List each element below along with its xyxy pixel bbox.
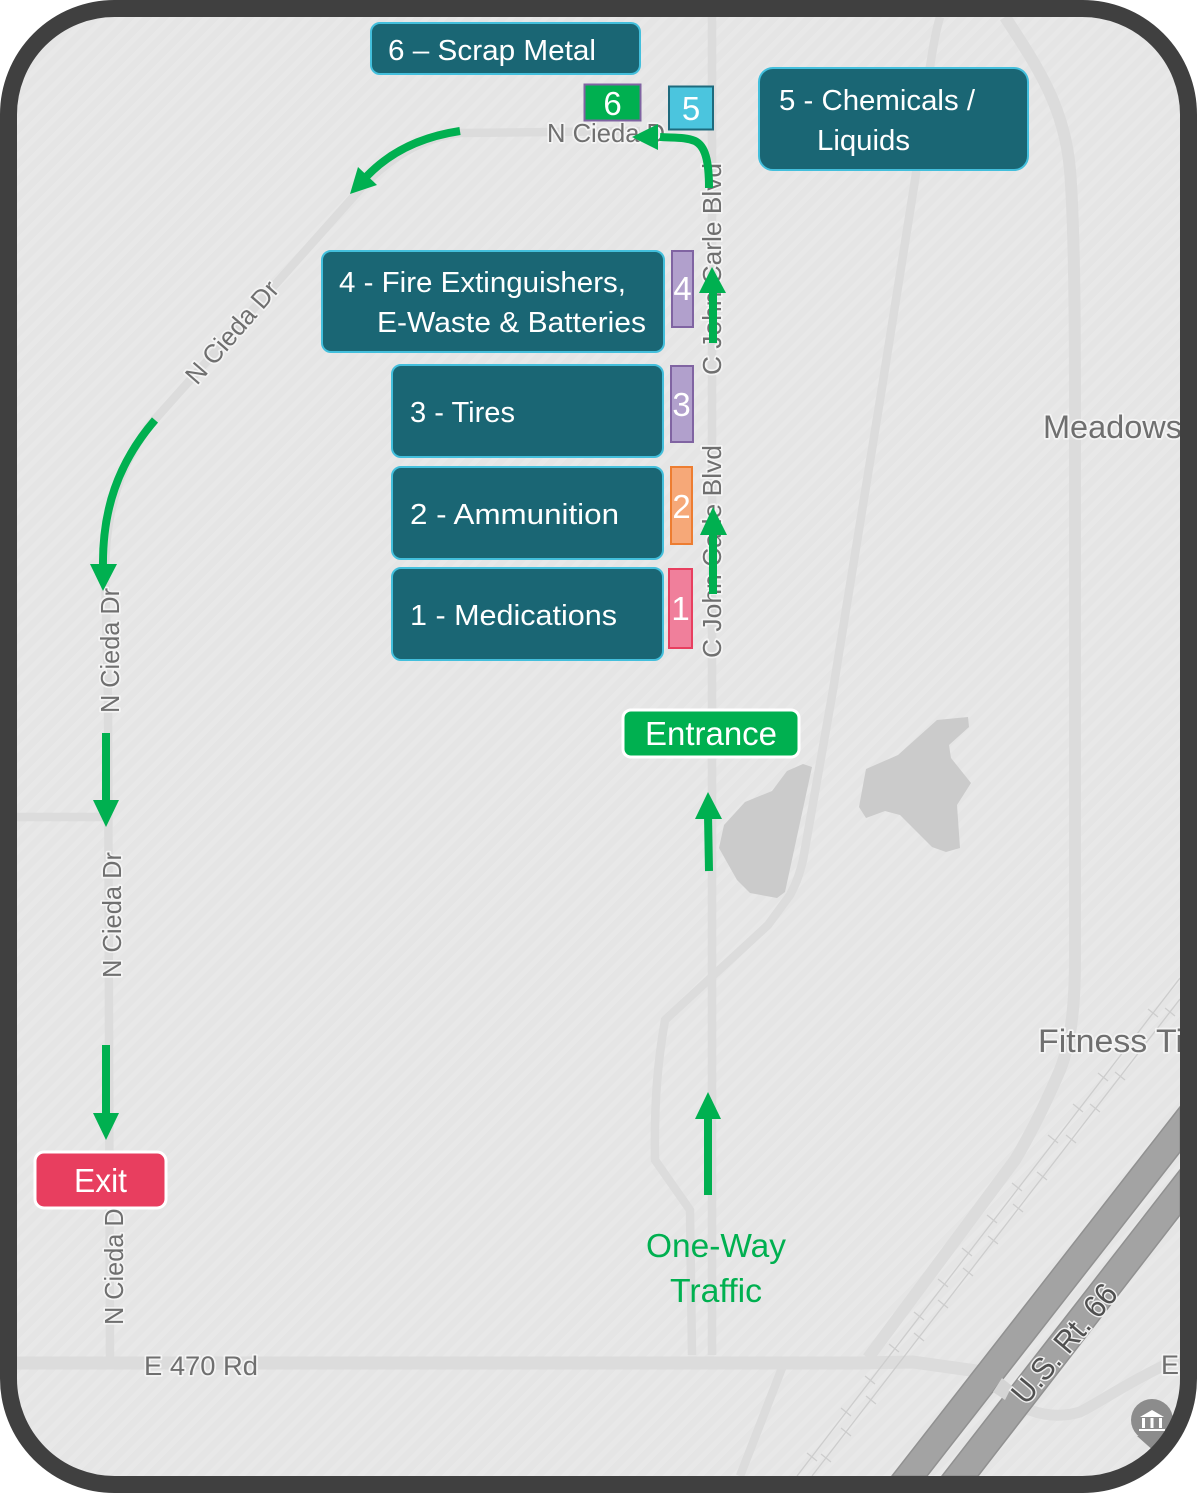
- marker: station 1: [669, 569, 692, 648]
- arrow: curve down to west: [90, 420, 155, 591]
- road label: E: E: [1161, 1350, 1179, 1380]
- panel: 1 Medications: 1 - Medications: [410, 600, 617, 632]
- marker: station 3: 3: [672, 386, 691, 423]
- icon: museum map pin: [1131, 1399, 1173, 1452]
- road label: N Cieda Dr west 1: N Cieda Dr: [95, 588, 125, 713]
- marker: station 6: [584, 84, 640, 122]
- road label: N Cieda Dr diagonal: N Cieda Dr: [179, 274, 285, 390]
- road label: E 470 Rd: E 470 Rd: [144, 1351, 258, 1381]
- marker: station 2: [671, 467, 692, 544]
- arrow: stations 3 to 4: [699, 267, 726, 343]
- label: One-Way Traffic: One-Way: [646, 1227, 787, 1264]
- panel: 5 Chemicals / Liquids: 5 - Chemicals /: [779, 85, 976, 117]
- panel: 5 Chemicals / Liquids: [759, 68, 1028, 170]
- road label: U.S. Rt. 66: U.S. Rt. 66: [1004, 1276, 1125, 1410]
- marker: station 5: 5: [682, 90, 700, 127]
- label: Exit: [35, 1152, 166, 1208]
- arrow: N Cieda Dr south 1: [93, 733, 119, 827]
- marker: station 2: 2: [672, 488, 691, 525]
- panel: 6 Scrap Metal: 6 – Scrap Metal: [388, 35, 596, 67]
- marker: station 1: 1: [671, 590, 690, 627]
- arrow: before entrance: [695, 792, 722, 871]
- marker: station 6: 6: [603, 85, 622, 122]
- panel: 2 Ammunition: [392, 467, 663, 559]
- road label: C John Carle Blvd lower: C John Carle Blvd: [697, 445, 727, 658]
- railway tracks: [797, 978, 1180, 1476]
- label: Exit: Exit: [74, 1162, 127, 1199]
- panel: 5 Chemicals / Liquids: Liquids: [817, 125, 910, 157]
- road label: N Cieda Dr top: N Cieda D: [547, 118, 665, 148]
- road label: N Cieda Dr west 3: N Cieda Dr: [99, 1200, 129, 1325]
- marker: station 3: [671, 366, 693, 442]
- label: Entrance: Entrance: [645, 715, 777, 752]
- arrow: stations 1 to 2: [700, 507, 727, 594]
- arrow: curve on N Cieda Dr: [350, 131, 460, 194]
- panel: 4 Fire Extinguishers, E-Waste and Batteries: 4 - Fire Extinguishers,: [339, 267, 626, 299]
- highway: U.S. Rt. 66: [892, 1107, 1180, 1476]
- arrow: turn to station 6: [632, 124, 709, 188]
- panel: 2 Ammunition: 2 - Ammunition: [410, 499, 619, 531]
- arrow: bottom one-way: [695, 1092, 721, 1195]
- marker: station 4: 4: [673, 270, 692, 307]
- panel: 4 Fire Extinguishers, E-Waste and Batteries: E-Waste & Batteries: [377, 307, 646, 339]
- place label: Fitness Trail: Fitness Ti: [1038, 1023, 1183, 1059]
- panel: 1 Medications: [392, 568, 663, 660]
- road label: C John Carle Blvd upper: C John Carle Blvd: [697, 163, 727, 375]
- marker: station 5: [669, 86, 713, 130]
- panel: 3 Tires: 3 - Tires: [410, 397, 515, 429]
- place label: Meadows: Meadows: [1043, 409, 1182, 445]
- arrow: N Cieda Dr south 2: [93, 1045, 119, 1140]
- road label: N Cieda Dr west 2: N Cieda Dr: [97, 852, 127, 978]
- marker: station 4: [672, 251, 693, 327]
- panel: 6 Scrap Metal: [371, 23, 640, 74]
- label: Entrance: [623, 710, 799, 757]
- lake: west pond: [719, 764, 812, 898]
- panel: 3 Tires: [392, 365, 663, 457]
- label: One-Way Traffic: [646, 1227, 787, 1309]
- label: One-Way Traffic: Traffic: [670, 1272, 762, 1309]
- lake: east pond: [859, 717, 971, 852]
- panel: 4 Fire Extinguishers, E-Waste and Batteries: [322, 251, 664, 352]
